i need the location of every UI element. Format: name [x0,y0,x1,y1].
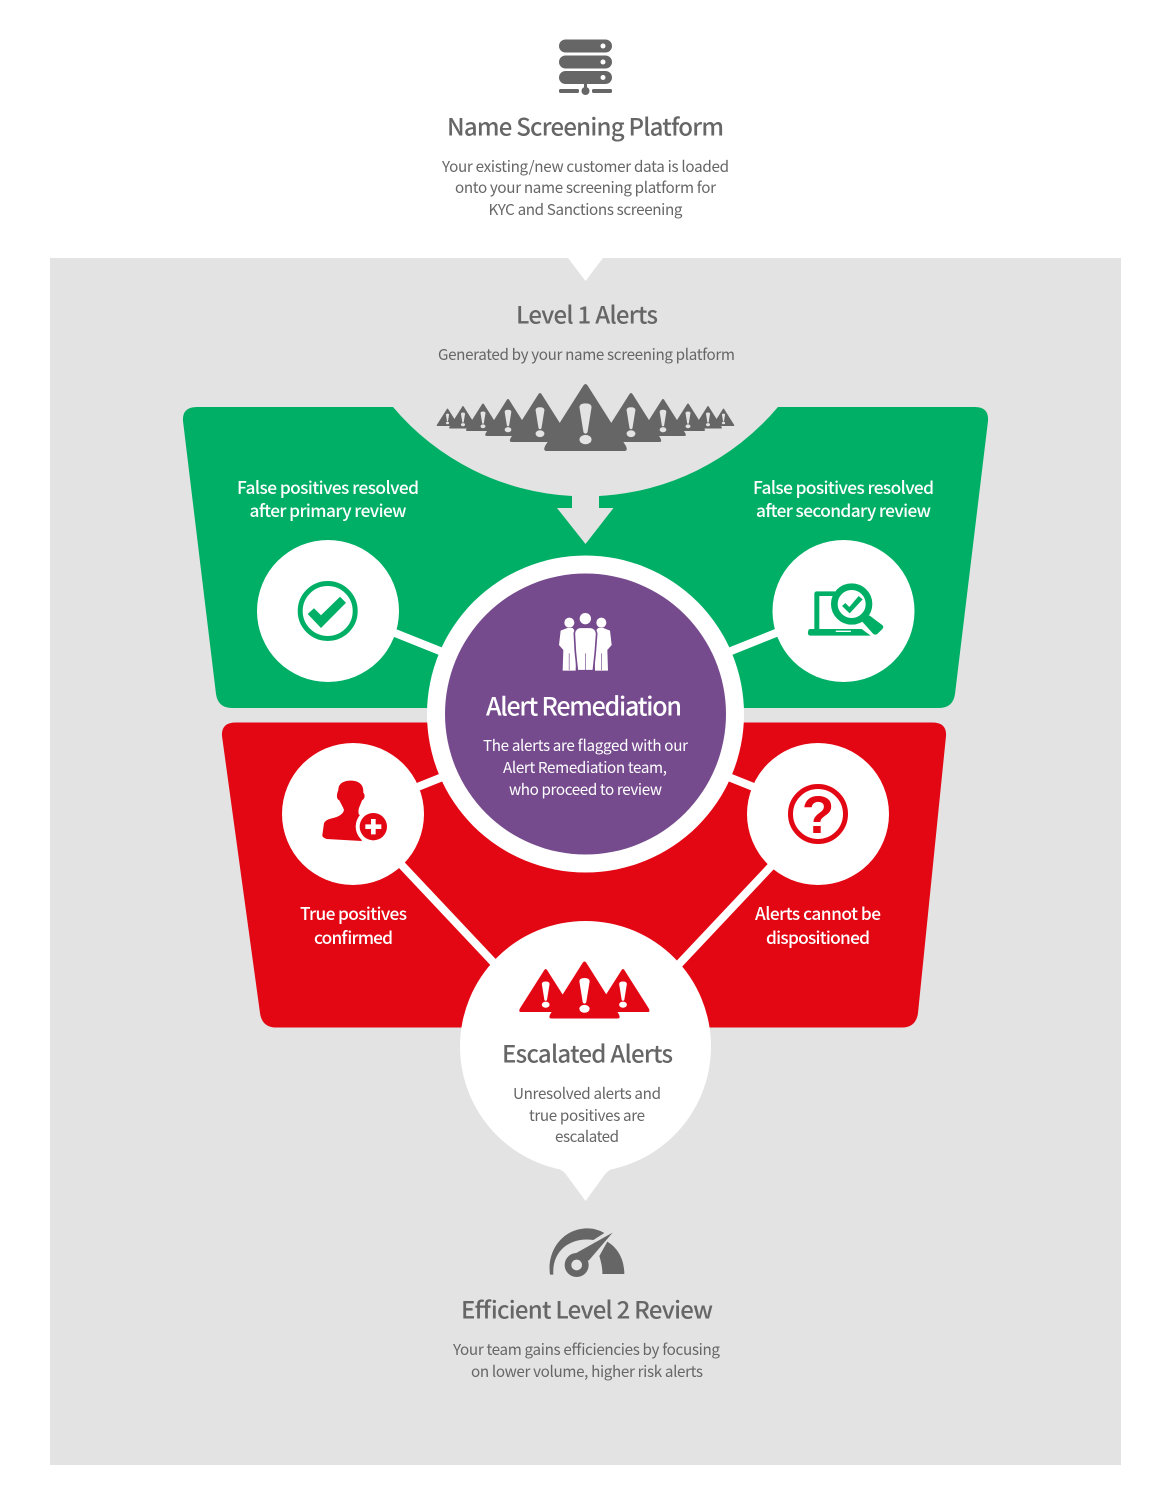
text: platform description [441,155,729,220]
panel: green false positives [183,407,988,708]
heading: Escalated Alerts: Escalated Alerts [502,1034,673,1070]
icon: level 1 alert triangles [437,384,734,451]
icon: question mark in white circle [747,743,889,885]
text: true positives confirmed: confirmed [314,924,393,949]
text: platform description: KYC and Sanctions screening [488,198,683,220]
panel: red true positives [222,722,946,1028]
panel: alert remediation circle [427,556,744,872]
text: efficient review description [452,1338,720,1382]
text: alerts cannot be dispositioned: Alerts cannot be [755,900,881,925]
text: true positives confirmed: True positives [300,900,407,925]
text: level 1 description: Generated by your name screening platform [438,343,735,365]
icon: check in white circle [257,540,399,682]
text: alert remediation description: The alerts are flagged with our [483,734,688,756]
panel: escalated alerts circle with pointer [460,921,711,1201]
text: alert remediation description: Alert Remediation team, [503,756,667,778]
heading: Alert Remediation: Alert Remediation [486,688,682,724]
heading: Name Screening Platform: Name Screening Platform [447,108,724,142]
panel: grey process background [50,258,1121,1465]
text: true positives confirmed [300,900,407,949]
icon: question mark in white circle: ? [802,786,834,845]
text: false positives secondary [753,474,934,522]
icon: server [559,40,612,95]
text: escalated description [513,1082,661,1147]
text: alerts cannot be dispositioned: dispositioned [766,924,870,949]
text: platform description: onto your name screening platform for [455,176,716,198]
icon: team of people [559,613,612,671]
text: false positives secondary: after secondary review [756,497,931,522]
text: efficient review description: on lower volume, higher risk alerts [471,1360,703,1382]
text: alert remediation description: who proceed to review [509,778,662,800]
text: false positives primary [237,474,419,522]
heading: Efficient Level 2 Review: Efficient Level 2 Review [461,1290,713,1326]
text: false positives primary: False positives resolved [237,474,419,499]
text: efficient review description: Your team gains efficiencies by focusing [452,1338,720,1360]
text: alerts cannot be dispositioned [755,900,881,949]
text: escalated description: true positives are [529,1104,645,1126]
text: escalated description: Unresolved alerts and [513,1082,661,1104]
connector lines [380,627,794,980]
text: platform description: Your existing/new customer data is loaded [441,155,729,177]
text: escalated description: escalated [555,1125,619,1147]
icon: speedometer gauge [550,1228,624,1277]
text: false positives primary: after primary review [250,497,406,522]
icon: person with plus in white circle [282,743,424,885]
text: alert remediation description [483,734,688,800]
heading: Level 1 Alerts: Level 1 Alerts [516,296,658,330]
icon: red alert triangles [519,962,649,1018]
text: false positives secondary: False positives resolved [753,474,934,499]
icon: laptop with magnifier in white circle [772,540,914,682]
